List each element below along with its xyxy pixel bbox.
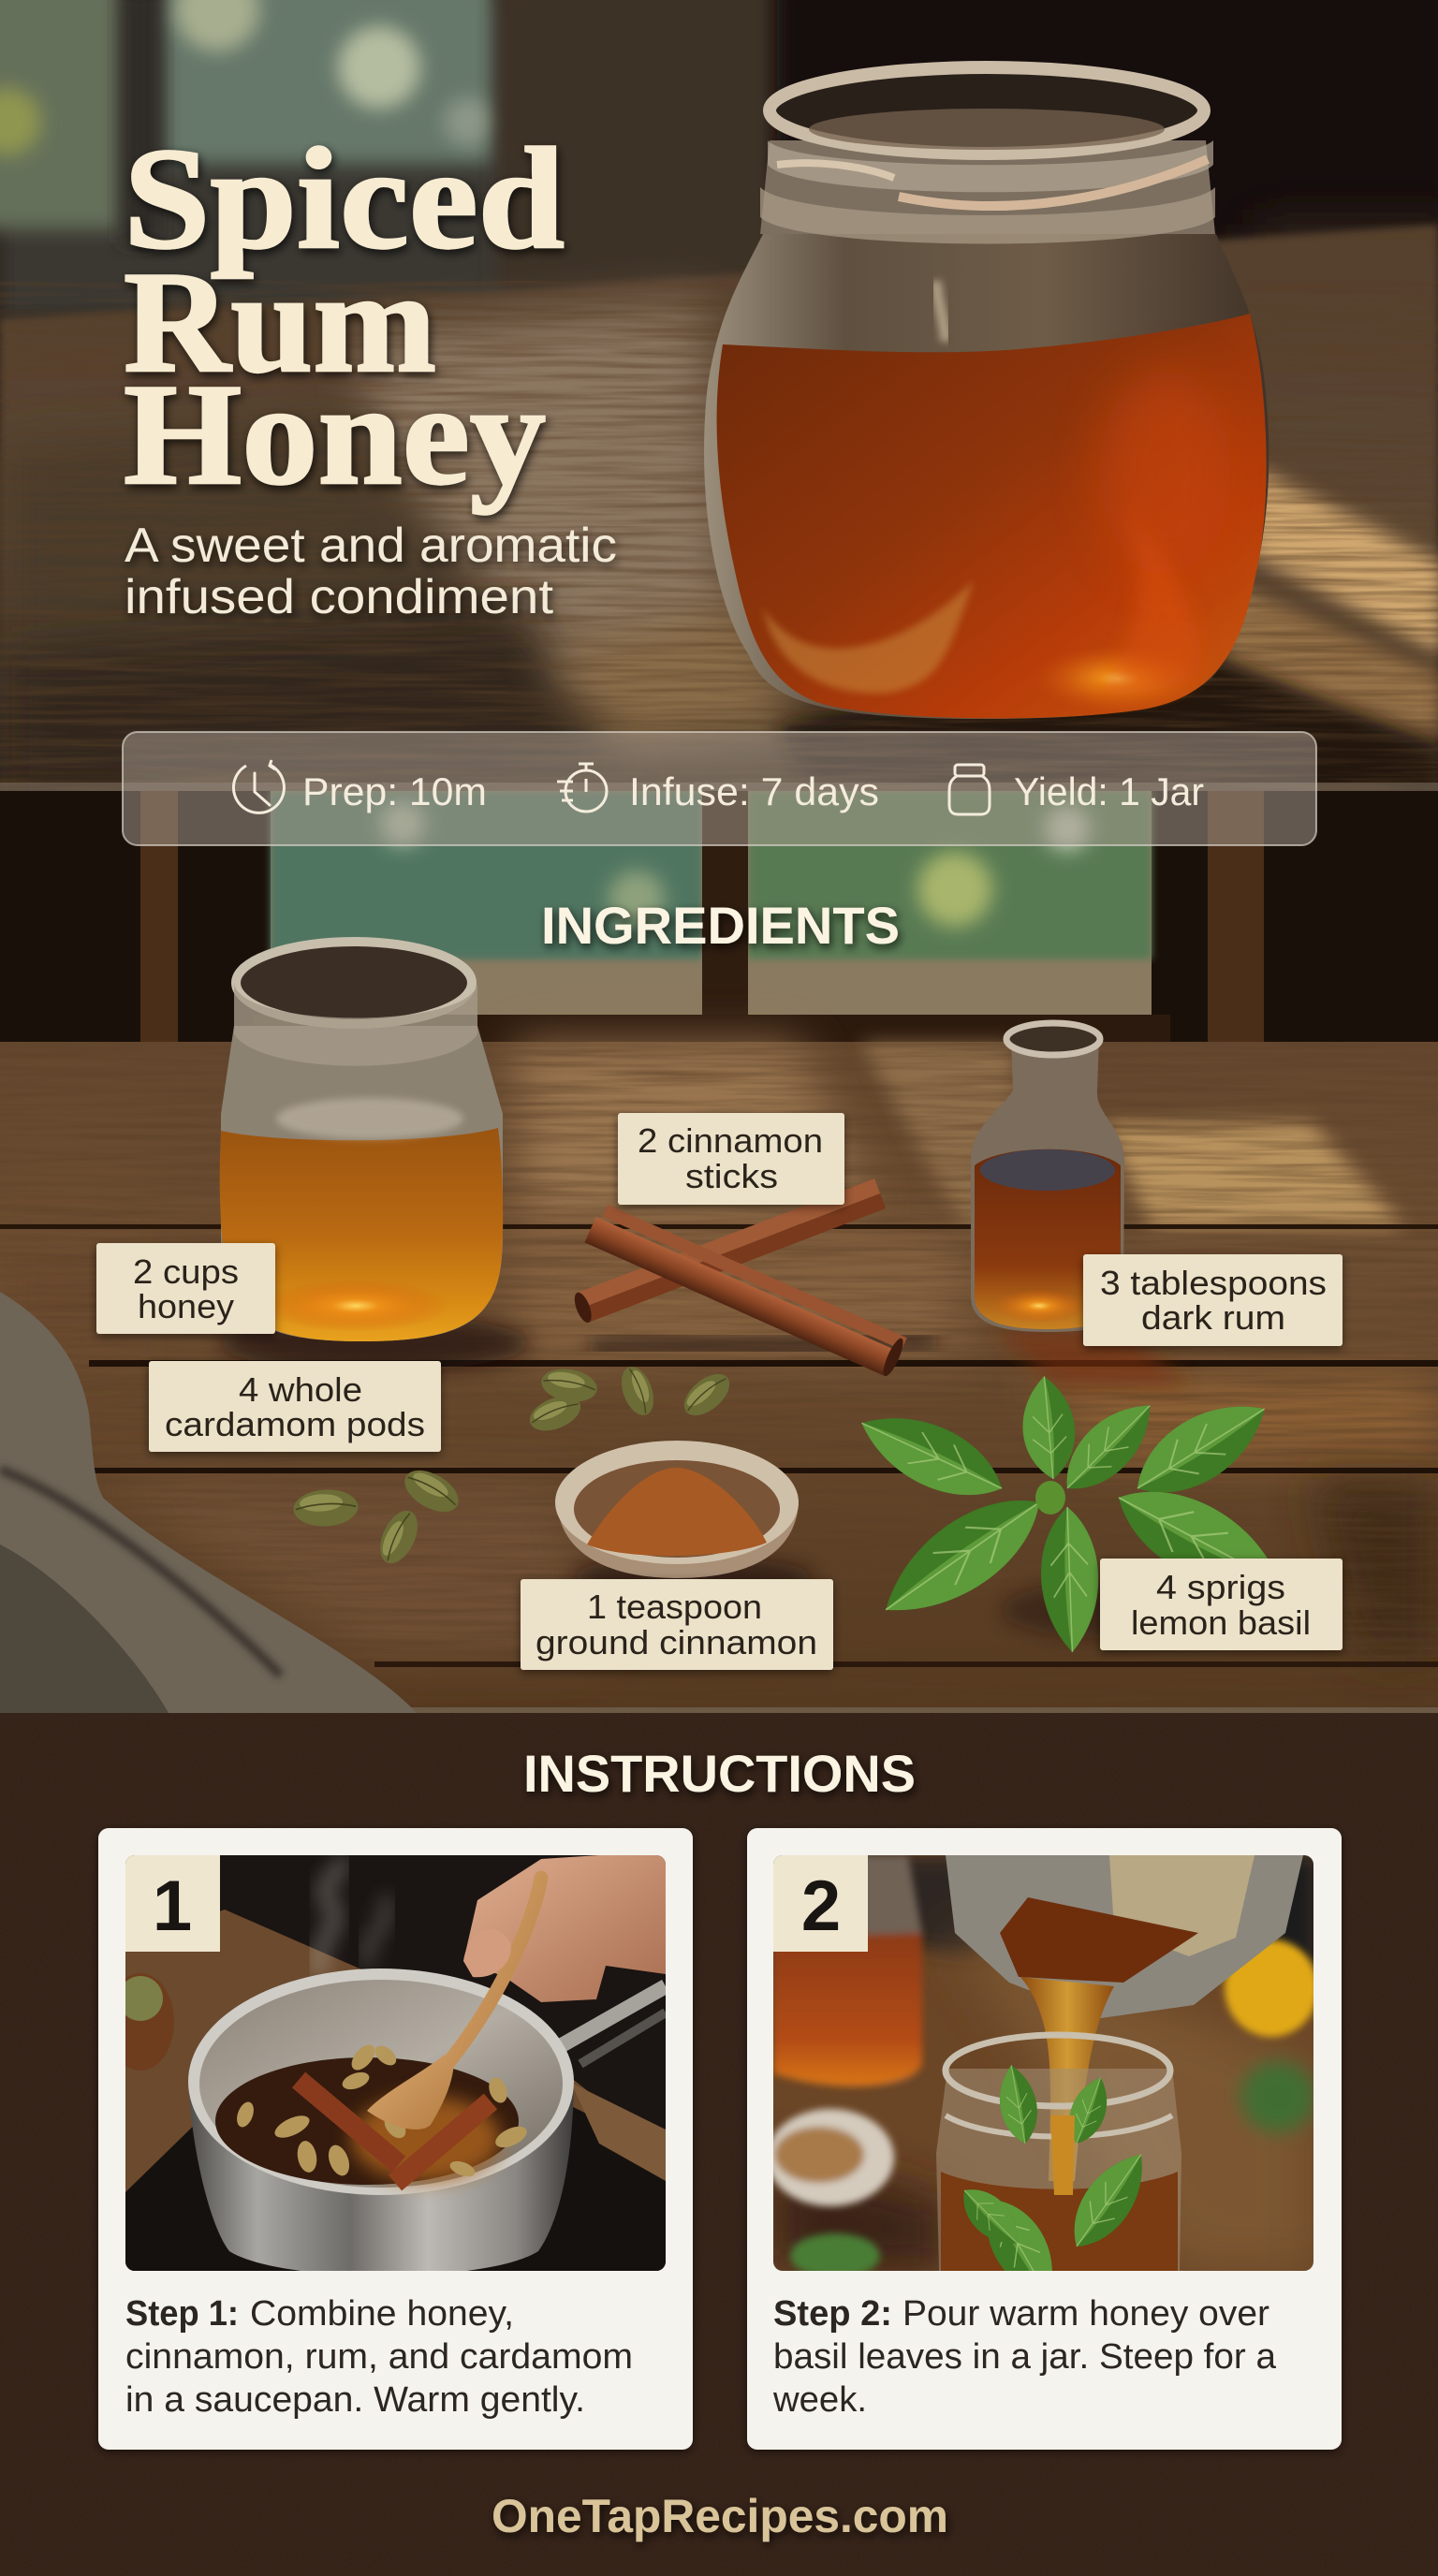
- label: 4 sprigs lemon basil: [1100, 1559, 1343, 1650]
- number badge 1: [125, 1855, 220, 1952]
- steam: [318, 1858, 340, 1975]
- blurred honey jar: [773, 1855, 922, 2086]
- lemon basil: [849, 1374, 1297, 1653]
- label: 2 cinnamon sticks: [618, 1113, 844, 1205]
- honey jar: [704, 67, 1269, 719]
- cardamom pods: [293, 1362, 737, 1569]
- bowl of ground cinnamon: [555, 1441, 814, 1598]
- label: 4 sprigs lemon basil: 4 sprigs: [1156, 1568, 1285, 1606]
- cinnamon sticks: [571, 1178, 936, 1379]
- small bowl of pods: [107, 1973, 174, 2071]
- step 1 text: in a saucepan. Warm gently.: [125, 2380, 585, 2420]
- icon: clock: [233, 760, 284, 812]
- label: 2 cinnamon sticks: 2 cinnamon: [638, 1121, 823, 1160]
- lemon and basil, blurred: [1225, 1939, 1318, 2037]
- cardamom pods: [234, 2041, 530, 2179]
- label: 1 teaspoon ground cinnamon: [521, 1579, 833, 1670]
- label: 3 tablespoons dark rum: 3 tablespoons: [1100, 1264, 1327, 1302]
- number badge 2: [773, 1855, 868, 1952]
- label: 2 cinnamon sticks: sticks: [685, 1157, 778, 1195]
- footer brand: OneTapRecipes.com: [492, 2490, 948, 2542]
- step 1 text: Combine honey,: [250, 2294, 514, 2334]
- step 1 text: cinnamon, rum, and cardamom: [125, 2337, 633, 2377]
- hero background: [0, 0, 1438, 796]
- jar rim: [770, 67, 1204, 154]
- card: step 1: [98, 1828, 693, 2450]
- saucepan pouring: [946, 1855, 1303, 2018]
- label: 3 tablespoons dark rum: dark rum: [1141, 1298, 1285, 1337]
- blurred bowl of cinnamon: [767, 2109, 894, 2206]
- label: 4 whole cardamom pods: [149, 1361, 441, 1452]
- card: step 2: [747, 1828, 1342, 2450]
- image: saucepan on stove: [107, 1855, 666, 2276]
- infuse text: Infuse: 7 days: [629, 769, 879, 813]
- window backdrop: [0, 791, 1438, 1048]
- subtitle: [125, 519, 617, 624]
- mason jar: [936, 2035, 1181, 2310]
- step 2 text: week.: [772, 2380, 867, 2420]
- image: pouring honey into jar: [767, 1853, 1320, 2310]
- honey: [717, 314, 1267, 718]
- liquid: [215, 2057, 519, 2185]
- linen cloth: [0, 1292, 417, 1713]
- label: 2 cups honey: honey: [138, 1287, 234, 1325]
- jar neck: [760, 140, 1215, 234]
- wooden spoon: [448, 1878, 541, 2064]
- honey jar in ingredients: [220, 942, 529, 1371]
- yield text: Yield: 1 Jar: [1014, 769, 1204, 813]
- stats bar: [123, 732, 1316, 845]
- label: 3 tablespoons dark rum: [1083, 1254, 1343, 1346]
- title: [124, 118, 565, 515]
- title: Spiced: [124, 118, 565, 279]
- step 1 text: Step 1:: [125, 2294, 239, 2334]
- hand: [463, 1855, 666, 2002]
- panel: instructions: [0, 1713, 1438, 2576]
- honey bottom glow: [1050, 651, 1191, 709]
- subtitle: infused condiment: [125, 570, 554, 624]
- step 2 text: [772, 2294, 1277, 2420]
- step 2 text: basil leaves in a jar. Steep for a: [773, 2337, 1277, 2377]
- rum bottle: [971, 1023, 1189, 1385]
- label: 4 whole cardamom pods: 4 whole: [239, 1370, 362, 1409]
- pan body: [188, 2082, 574, 2276]
- heading: ingredients: INGREDIENTS: [541, 896, 900, 955]
- step 1 text: [125, 2294, 633, 2420]
- honey stream: [1020, 1977, 1114, 2181]
- panel: ingredients: [0, 791, 1438, 1713]
- number badge 2: 2: [801, 1866, 841, 1946]
- label: 2 cups honey: [96, 1243, 275, 1334]
- step 2 text: Step 2:: [773, 2294, 892, 2334]
- label: 4 whole cardamom pods: cardamom pods: [165, 1405, 425, 1443]
- icon: stopwatch: [557, 764, 607, 812]
- cinnamon sticks: [299, 2080, 399, 2164]
- icon: jar: [949, 765, 990, 814]
- label: 1 teaspoon ground cinnamon: 1 teaspoon: [587, 1588, 762, 1626]
- title: Rum: [124, 242, 436, 402]
- label: 2 cups honey: 2 cups: [133, 1252, 239, 1291]
- label: 4 sprigs lemon basil: lemon basil: [1131, 1603, 1311, 1642]
- prep text: Prep: 10m: [302, 769, 487, 813]
- jar glass: [704, 234, 1269, 719]
- number badge 1: 1: [153, 1866, 192, 1946]
- pan handle: [562, 1986, 666, 2045]
- wooden table: [0, 1042, 1438, 1713]
- heading: instructions: INSTRUCTIONS: [523, 1744, 916, 1803]
- title: Honey: [124, 354, 546, 515]
- subtitle: A sweet and aromatic: [125, 519, 617, 573]
- panel: hero with title and honey jar: [0, 0, 1438, 796]
- step 2 text: Pour warm honey over: [902, 2294, 1269, 2334]
- label: 1 teaspoon ground cinnamon: ground cinnamon: [536, 1623, 817, 1661]
